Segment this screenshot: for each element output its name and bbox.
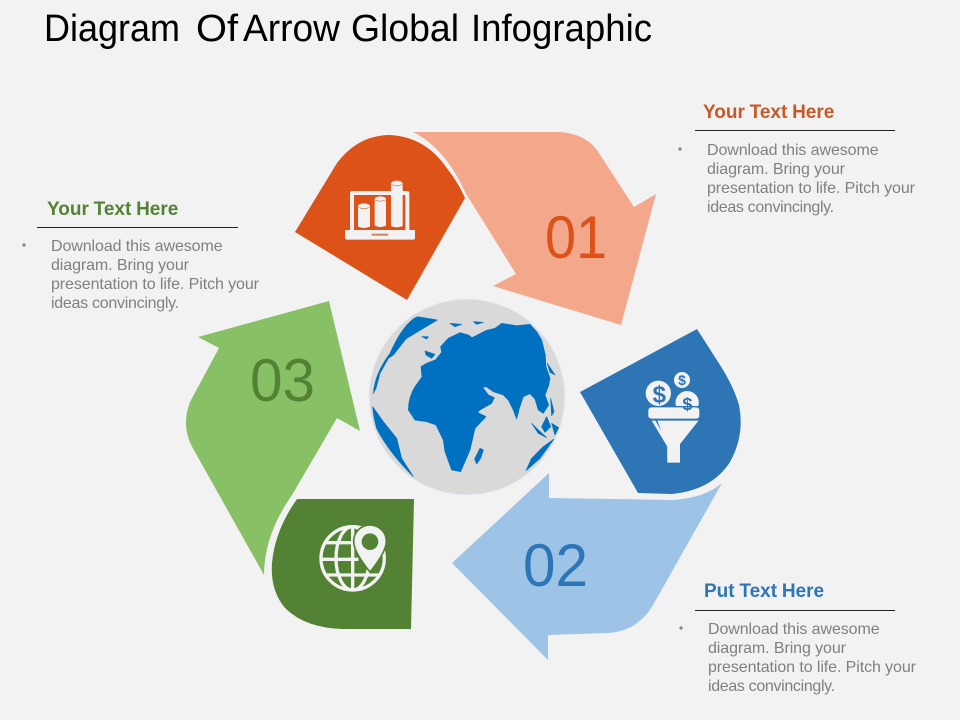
body text: ideas convincingly. — [708, 678, 835, 695]
text block: top right — [678, 102, 916, 216]
heading: Put Text Here — [704, 581, 824, 602]
body text: Download this awesome — [51, 238, 223, 255]
text block: left — [22, 199, 260, 312]
continent: South America — [373, 407, 413, 477]
title: Arrow — [243, 8, 341, 50]
island: Australia — [526, 439, 554, 471]
icon: globe with pin — [321, 525, 386, 590]
arrow 02: light blue — [452, 473, 722, 660]
petal: orange with chart icon — [295, 135, 465, 300]
petal: dark green with location icon — [272, 499, 414, 629]
title: Infographic — [471, 8, 652, 50]
heading: Your Text Here — [47, 199, 178, 220]
arrow 03: green — [186, 301, 360, 575]
islands: Indonesia and Japan — [422, 322, 559, 438]
globe — [369, 299, 565, 495]
body text: diagram. Bring your — [707, 161, 846, 178]
petal: blue with funnel icon — [580, 329, 741, 494]
title: Diagram — [44, 8, 180, 50]
body text: diagram. Bring your — [51, 257, 190, 274]
body text: presentation to life. Pitch your — [707, 180, 916, 197]
text block: bottom right — [679, 581, 917, 695]
title: Global — [351, 8, 459, 50]
arrow 01: salmon — [413, 132, 656, 325]
body text: ideas convincingly. — [51, 295, 179, 312]
number 02: 02 — [523, 532, 588, 599]
icon: money funnel: $ — [653, 382, 666, 409]
title: Of — [196, 8, 238, 50]
number 03: 03 — [250, 347, 315, 414]
icon: laptop with bar chart — [345, 181, 415, 240]
icon: money funnel: $ — [678, 372, 686, 388]
body text: Download this awesome — [707, 142, 879, 159]
body text: presentation to life. Pitch your — [708, 659, 917, 676]
icon: money funnel — [646, 372, 699, 463]
continent: Africa and Eurasia — [408, 323, 550, 472]
icon: money funnel: $ — [682, 394, 692, 414]
body text: Download this awesome — [708, 621, 880, 638]
body text: diagram. Bring your — [708, 640, 847, 657]
body text: presentation to life. Pitch your — [51, 276, 260, 293]
heading: Your Text Here — [703, 102, 834, 123]
island: Madagascar — [475, 448, 483, 464]
body text: ideas convincingly. — [707, 199, 834, 216]
continent: Greenland and North America — [373, 317, 437, 393]
number 01: 01 — [545, 204, 607, 271]
